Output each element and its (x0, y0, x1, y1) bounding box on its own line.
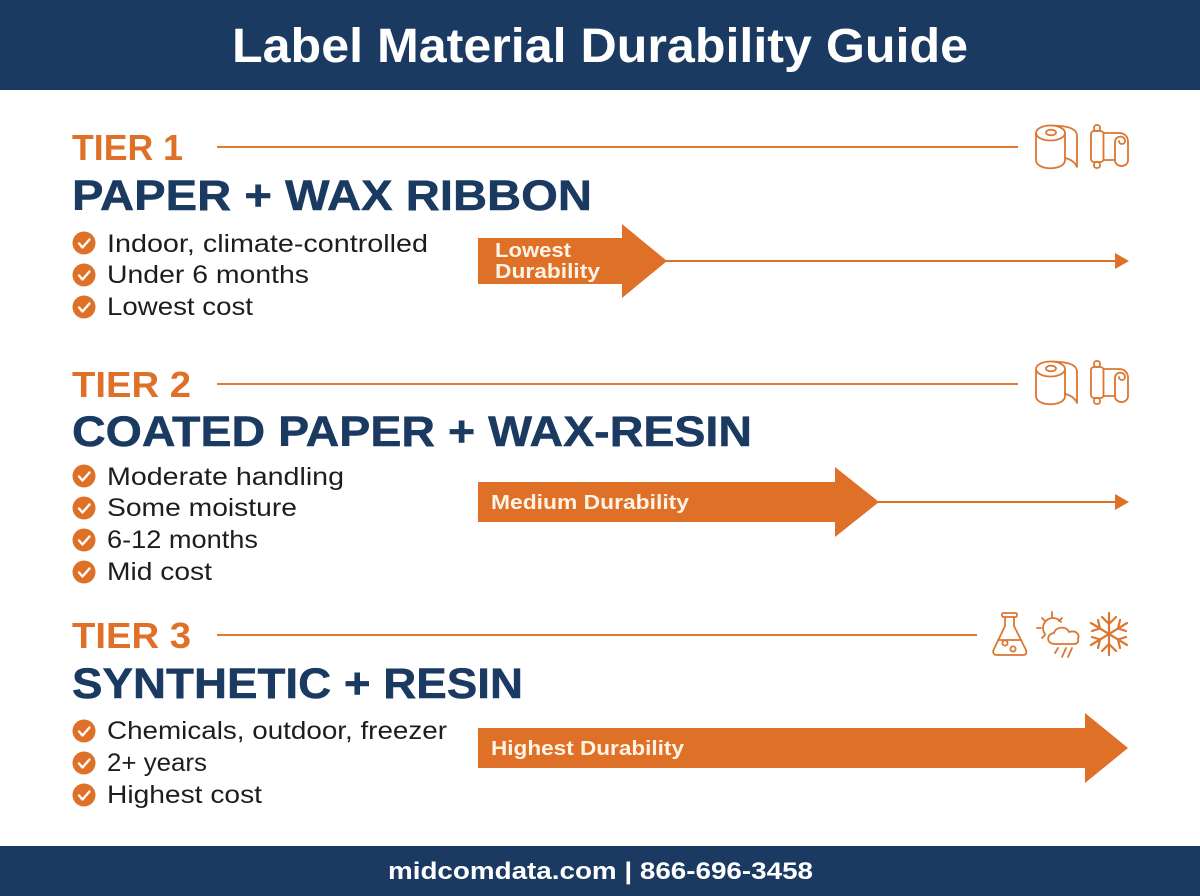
arrow: highest durability: Highest Durability (491, 738, 685, 760)
footer banner (0, 846, 1200, 896)
tier 1 checklist (72, 230, 428, 321)
tier 2 checklist: Mid cost (107, 558, 212, 586)
icon: snowflake (1091, 613, 1127, 655)
icon: paper roll and ribbon (1036, 361, 1128, 404)
arrow: lowest durability (478, 224, 1129, 298)
icon: weather (1037, 612, 1079, 657)
icon: paper roll and ribbon (1036, 125, 1128, 168)
tier 3 checklist: 2+ years (107, 749, 207, 777)
tier 2 heading: COATED PAPER + WAX-RESIN (72, 408, 752, 456)
arrow: lowest durability: Durability (495, 261, 601, 283)
tier 1 heading: PAPER + WAX RIBBON (72, 172, 592, 220)
tier 2 label: TIER 2 (72, 364, 191, 405)
arrow: lowest durability: Lowest (495, 240, 571, 262)
tier 1 checklist: Under 6 months (107, 261, 309, 289)
tier 3 checklist: Chemicals, outdoor, freezer (107, 717, 447, 745)
tier 3 checklist: Highest cost (107, 781, 262, 809)
tier 3 heading: SYNTHETIC + RESIN (72, 660, 523, 708)
tier 2 checklist: 6-12 months (107, 526, 258, 554)
tier 1 checklist: Indoor, climate-controlled (107, 230, 428, 258)
arrow: highest durability (478, 713, 1128, 783)
title banner (0, 0, 1200, 90)
tier 2 checklist: Moderate handling (107, 463, 344, 491)
arrow: medium durability: Medium Durability (491, 492, 690, 514)
arrow: medium durability (478, 467, 1129, 537)
panel: tier 2 (72, 361, 1129, 586)
icon: flask (993, 613, 1026, 655)
panel: tier 1 (72, 125, 1129, 321)
tier 3 checklist (72, 717, 447, 809)
tier 2 checklist: Some moisture (107, 494, 297, 522)
tier 1 label: TIER 1 (72, 127, 183, 168)
contact details: midcomdata.com | 866-696-3458 (388, 858, 813, 885)
panel: tier 3 (72, 612, 1128, 809)
title: Label Material Durability Guide (232, 20, 968, 73)
tier 2 checklist (72, 463, 344, 586)
tier 1 checklist: Lowest cost (107, 293, 253, 321)
tier 3 label: TIER 3 (72, 615, 191, 656)
